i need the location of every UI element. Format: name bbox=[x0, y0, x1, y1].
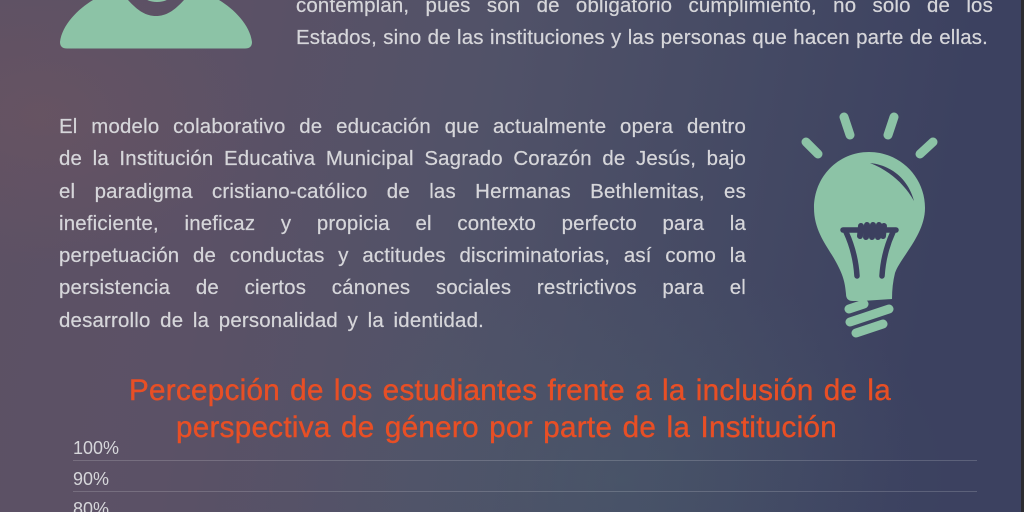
chart title: perspectiva de género por parte de la Institución bbox=[176, 411, 837, 444]
text block: obligations bbox=[296, 0, 993, 49]
text block: collaborative model: de la Institución Educativa Municipal Sagrado Corazón de Jesús, bajo bbox=[59, 148, 746, 170]
text block: collaborative model: persistencia de ciertos cánones sociales restrictivos para el bbox=[59, 277, 746, 299]
icon: light bulb bbox=[802, 112, 938, 338]
text block: collaborative model: El modelo colaborativo de educación que actualmente opera dentro bbox=[59, 116, 746, 138]
text block: obligations: Estados, sino de las instituciones y las personas que hacen parte de ellas. bbox=[296, 27, 988, 49]
text block: collaborative model bbox=[59, 116, 746, 332]
chart: axis and grid bbox=[73, 438, 977, 512]
chart title: Percepción de los estudiantes frente a la inclusión de la bbox=[129, 374, 891, 407]
chart: axis and grid: 90% bbox=[73, 469, 109, 489]
text block: collaborative model: desarrollo de la personalidad y la identidad. bbox=[59, 310, 484, 332]
text block: collaborative model: perpetuación de conductas y actitudes discriminatorias, así como la bbox=[59, 245, 746, 267]
icon: person silhouette bbox=[60, 0, 252, 48]
chart: axis and grid: 100% bbox=[73, 438, 119, 458]
chart title bbox=[129, 374, 891, 444]
text block: collaborative model: ineficiente, ineficaz y propicia el contexto perfecto para la bbox=[59, 213, 746, 235]
text block: collaborative model: el paradigma cristiano-católico de las Hermanas Bethlemitas, es bbox=[59, 181, 746, 203]
